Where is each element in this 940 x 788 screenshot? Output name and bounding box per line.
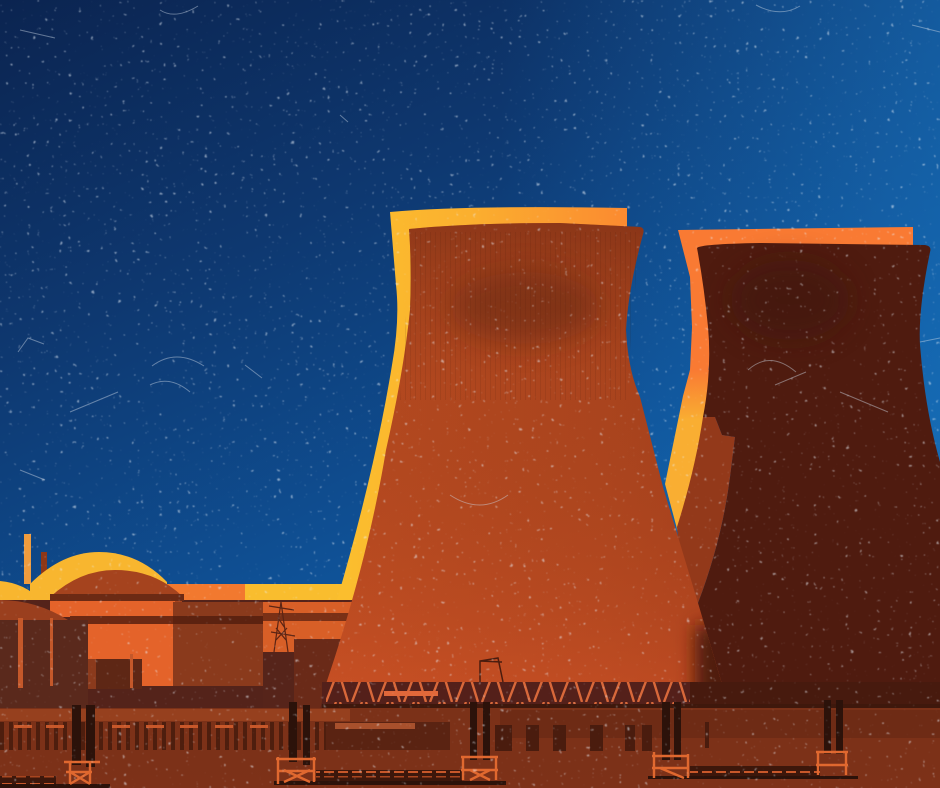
bridge pillars [495,722,709,751]
main cooling tower [326,223,722,682]
main tower yellow back outline [337,207,627,600]
lower right fade of main tower into shadow [683,614,722,682]
truss platform under the towers [322,682,940,710]
low building band behind main tower [165,584,352,604]
vertical ribs on main tower [400,232,640,400]
electricity pylon [269,602,295,652]
mooring dolphins and barges [0,700,858,788]
right cooling tower [670,243,940,720]
small crane on platform [480,658,503,682]
pier frames [64,752,848,784]
chimneys [24,534,47,602]
scratch marks [18,5,940,505]
lit side of right tower [677,417,735,603]
right tower back outline in orange and yellow [665,227,913,540]
embankment and water [0,708,940,788]
shadow patch on right tower [730,260,850,340]
yellow reactor dome [30,552,167,600]
reactor buildings [0,570,352,712]
small yellow dome at left [0,581,41,600]
barges [0,776,56,788]
dark weathering patch on main tower [450,272,600,344]
